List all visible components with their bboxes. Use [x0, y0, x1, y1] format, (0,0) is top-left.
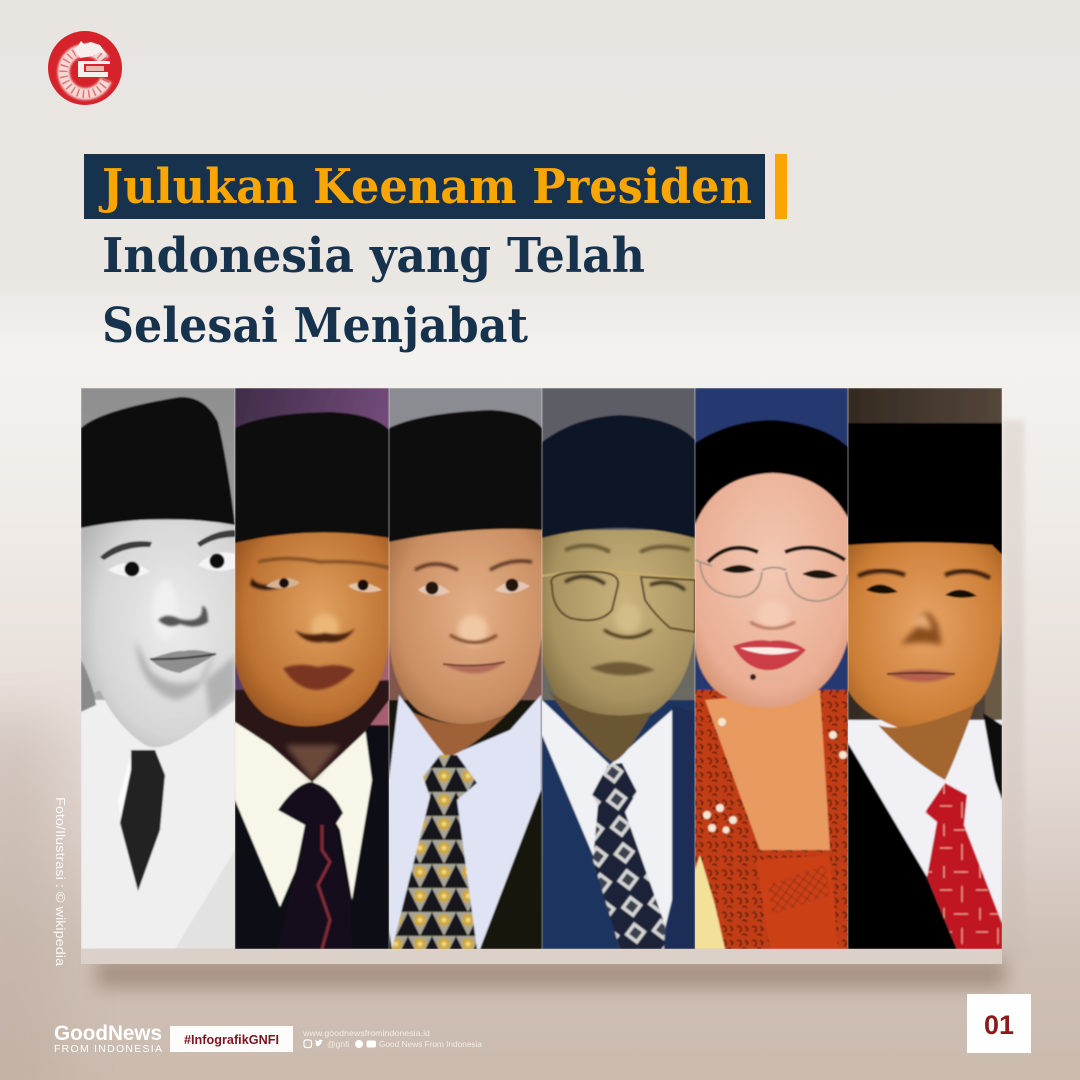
- nose: [615, 603, 641, 633]
- brows: [708, 548, 845, 562]
- tie: [120, 750, 165, 891]
- face: [235, 530, 389, 726]
- cap: [542, 415, 695, 538]
- icon: twitter: [315, 1039, 323, 1046]
- title line 3: Selesai Menjabat: [102, 298, 528, 354]
- face: [81, 520, 235, 747]
- board shadow: [96, 958, 1006, 988]
- face: [695, 473, 848, 708]
- nose: [757, 601, 789, 629]
- suit: [389, 700, 542, 949]
- website: www.goodnewsfromindonesia.id: [302, 1028, 430, 1038]
- mouth: [443, 662, 505, 674]
- shirt: [389, 695, 541, 949]
- shirt: [848, 720, 1002, 949]
- glasses: [695, 560, 848, 601]
- portrait panel 2: Soeharto: [235, 388, 389, 949]
- photo credit: Foto/Ilustrasi : © wikipedia: [53, 797, 67, 966]
- face: [848, 540, 1002, 730]
- title line 2: Indonesia yang Telah: [102, 228, 645, 284]
- neck shadow: [235, 680, 389, 782]
- mouth: [733, 640, 806, 670]
- yellow cloth: [695, 855, 725, 949]
- chest: [705, 690, 830, 850]
- brows: [100, 530, 235, 560]
- nose: [158, 606, 208, 627]
- page number: [967, 994, 1031, 1053]
- social name: Good News From Indonesia: [379, 1039, 482, 1049]
- tie: [278, 782, 352, 949]
- logo: GNFI red emblem: [48, 31, 122, 105]
- inner top: [756, 855, 838, 949]
- hashtag badge: [170, 1026, 293, 1052]
- brows: [258, 558, 389, 568]
- icon: youtube: [366, 1040, 376, 1048]
- tie: [592, 763, 665, 949]
- portrait panel 1: Sukarno: [81, 388, 235, 949]
- suit right: [983, 713, 1002, 800]
- suit: [81, 700, 235, 949]
- nose: [311, 614, 339, 640]
- nose: [900, 612, 942, 645]
- page number: 01: [984, 1010, 1014, 1040]
- cap: [389, 410, 542, 542]
- mouth: [590, 662, 655, 676]
- mouth: [150, 650, 216, 673]
- mouth: [887, 670, 955, 682]
- brows: [858, 571, 990, 578]
- face: [542, 530, 695, 731]
- portrait panel 6: Susilo Bambang Yudhoyono: [848, 388, 1002, 949]
- brand name: GoodNews: [54, 1022, 162, 1045]
- suit: [235, 725, 389, 949]
- mole: [750, 674, 756, 680]
- nose: [458, 615, 488, 645]
- portrait panel 3: Habibie: [389, 388, 542, 949]
- glasses: [542, 571, 695, 632]
- closed eyes: [565, 576, 685, 590]
- eyes: [418, 584, 450, 596]
- eyes: [266, 578, 300, 588]
- tie: [392, 755, 477, 949]
- shirt collar: [235, 720, 372, 907]
- footer: web and social: [302, 1028, 482, 1049]
- eyes: [866, 584, 977, 598]
- board edge: [81, 949, 1002, 964]
- title: [84, 154, 787, 354]
- hashtag badge: #InfografikGNFI: [184, 1033, 279, 1047]
- cap: [81, 397, 235, 528]
- title accent bar: [775, 154, 787, 219]
- eyes: [108, 563, 150, 577]
- hair: [695, 420, 848, 560]
- title highlight box: [84, 154, 765, 219]
- brows: [415, 561, 532, 570]
- collar: [118, 760, 131, 816]
- portrait panel 5: Megawati: [695, 388, 848, 949]
- tie: [925, 783, 1002, 949]
- cap: [235, 412, 389, 543]
- suit: [542, 700, 695, 949]
- social handle: @gnfi: [327, 1039, 349, 1049]
- mouth: [283, 665, 355, 690]
- shirt: [542, 700, 672, 949]
- title line 1: Julukan Keenam Presiden: [98, 159, 752, 215]
- cap: [848, 423, 1002, 555]
- portrait panel 4: Abdurrahman Wahid: [542, 388, 695, 949]
- suit left: [848, 743, 957, 949]
- icon: facebook: [355, 1040, 363, 1048]
- flowers: [703, 718, 847, 834]
- brand tagline: FROM INDONESIA: [54, 1043, 162, 1055]
- eyes: [722, 565, 838, 579]
- kebaya: [695, 690, 848, 949]
- face: [389, 528, 542, 724]
- brows: [565, 545, 690, 552]
- footer: brand: [54, 1022, 162, 1055]
- icon: instagram: [304, 1040, 312, 1048]
